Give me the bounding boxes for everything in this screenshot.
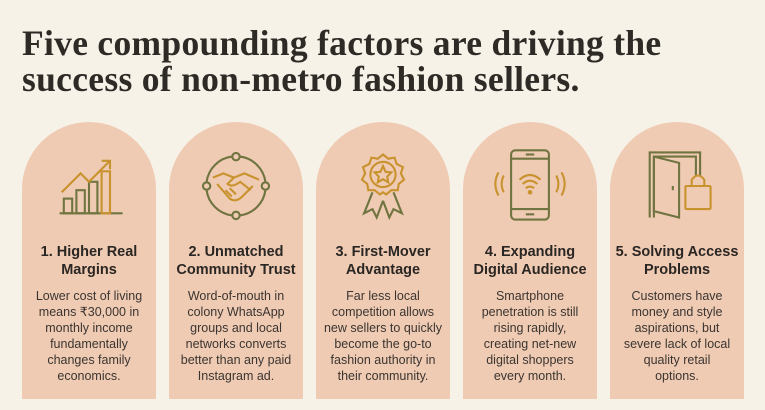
heading: Margins xyxy=(61,262,117,278)
body text xyxy=(624,289,730,383)
heading xyxy=(473,244,587,278)
heading xyxy=(616,244,738,278)
heading: 2. Unmatched xyxy=(188,244,284,260)
body text: severe lack of local xyxy=(624,337,730,351)
body text: Far less local competition allows new sellers to quickly become the go-to fashion authority in their community. xyxy=(324,289,442,383)
heading: Community Trust xyxy=(176,262,296,278)
panel: higher real margins xyxy=(22,122,156,399)
body text: options. xyxy=(655,369,699,383)
title xyxy=(22,23,661,99)
icon: bar chart rising xyxy=(60,160,123,214)
heading: Problems xyxy=(644,262,710,278)
icon: smartphone with wifi xyxy=(494,149,566,221)
body text: Word-of-mouth in colony WhatsApp groups and local networks converts better than any paid Instagram ad. xyxy=(181,289,291,383)
heading: Digital Audience xyxy=(473,262,587,278)
body text: quality retail xyxy=(644,353,710,367)
panel: digital audience xyxy=(463,122,597,399)
body text: aspirations, but xyxy=(635,321,719,335)
panel: first-mover advantage xyxy=(316,122,450,399)
heading xyxy=(335,244,431,278)
heading: 5. Solving Access xyxy=(616,244,738,260)
title: success of non-metro fashion sellers. xyxy=(22,59,580,99)
heading xyxy=(176,244,296,278)
panel: access problems xyxy=(610,122,744,399)
icon: door and shopping bag xyxy=(648,151,712,219)
title: Five compounding factors are driving the xyxy=(22,23,661,63)
body text: Customers have xyxy=(631,289,722,303)
body text: Lower cost of living means ₹30,000 in monthly income fundamentally changes family economics. xyxy=(36,289,142,383)
heading: 3. First-Mover xyxy=(335,244,431,260)
heading: 1. Higher Real xyxy=(41,244,137,260)
body text: Smartphone penetration is still rising rapidly, creating net-new digital shoppers every month. xyxy=(482,289,578,383)
heading: Advantage xyxy=(346,262,420,278)
heading xyxy=(41,244,137,278)
body text: money and style xyxy=(631,305,723,319)
heading: 4. Expanding xyxy=(485,244,575,260)
icon: handshake in network xyxy=(202,152,270,220)
icon: award ribbon xyxy=(360,153,406,220)
panel: community trust xyxy=(169,122,303,399)
